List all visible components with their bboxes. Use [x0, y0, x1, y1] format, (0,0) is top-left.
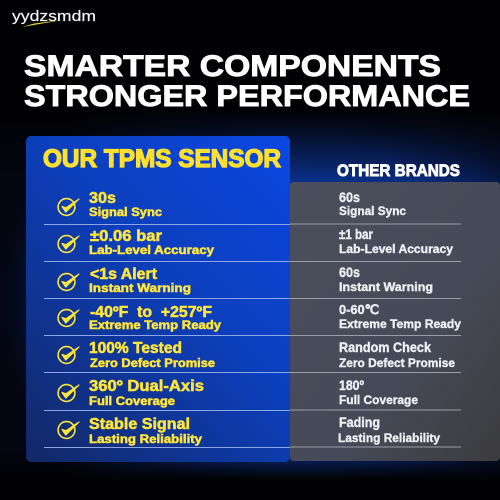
panel: other brands — [290, 182, 500, 461]
row: signal sync — [58, 190, 162, 219]
row: signal sync: Signal Sync — [339, 204, 406, 218]
row: alert — [58, 266, 191, 295]
row: accuracy — [339, 227, 453, 256]
row: alert: Instant Warning — [89, 281, 191, 295]
row: warning: 60s — [339, 265, 360, 280]
row: signal sync: Signal Sync — [89, 205, 162, 219]
row: tested: 100% Tested — [89, 340, 182, 357]
row: coverage: 360º Dual-Axis — [89, 378, 204, 395]
row: coverage: 180º — [339, 378, 364, 393]
row: warning: Instant Warning — [339, 280, 433, 294]
row: fading — [338, 415, 440, 445]
row: accuracy: Lab-Level Accuracy — [339, 242, 453, 256]
row: random check — [339, 340, 455, 370]
row: temperature: Extreme Temp Ready — [89, 318, 221, 332]
row: accuracy: ±0.06 bar — [90, 228, 162, 245]
row: fading: Fading — [339, 415, 380, 430]
heading: our TPMS sensor: OUR TPMS SENSOR — [43, 145, 281, 173]
panel: our TPMS sensor — [26, 136, 290, 462]
title: SMARTER COMPONENTS — [24, 50, 441, 83]
logo: yydzsmdm: yydzsmdm — [12, 8, 96, 25]
row: temperature: Extreme Temp Ready — [339, 317, 461, 331]
row: tested: Zero Defect Promise — [90, 356, 215, 370]
row: temperature — [339, 302, 461, 331]
row: signal sync: 60s — [339, 190, 360, 205]
row: warning — [339, 265, 433, 294]
row: stable signal — [58, 416, 202, 446]
row: tested — [58, 340, 215, 370]
row: fading: Lasting Reliability — [338, 431, 440, 445]
row: signal sync — [339, 190, 406, 218]
heading: other brands: OTHER BRANDS — [337, 161, 460, 180]
row: temperature — [58, 304, 221, 332]
row: coverage — [58, 378, 204, 408]
row: alert: <1s Alert — [90, 266, 157, 283]
row: accuracy — [58, 228, 214, 257]
row: random check: Zero Defect Promise — [339, 356, 455, 370]
row: signal sync: 30s — [89, 190, 116, 207]
row: accuracy: ±1 bar — [339, 227, 374, 242]
row: accuracy: Lab-Level Accuracy — [89, 243, 214, 257]
row: stable signal: Stable Signal — [89, 416, 190, 433]
title: STRONGER PERFORMANCE — [24, 80, 470, 113]
row: stable signal: Lasting Reliability — [89, 432, 202, 446]
row: temperature: -40ºF to +257ºF — [90, 304, 212, 321]
row: coverage: Full Coverage — [89, 394, 175, 408]
row: coverage — [339, 378, 418, 407]
row: coverage: Full Coverage — [339, 393, 418, 407]
row: random check: Random Check — [339, 340, 431, 355]
title — [24, 50, 470, 113]
row: temperature: 0-60℃ — [339, 302, 379, 317]
